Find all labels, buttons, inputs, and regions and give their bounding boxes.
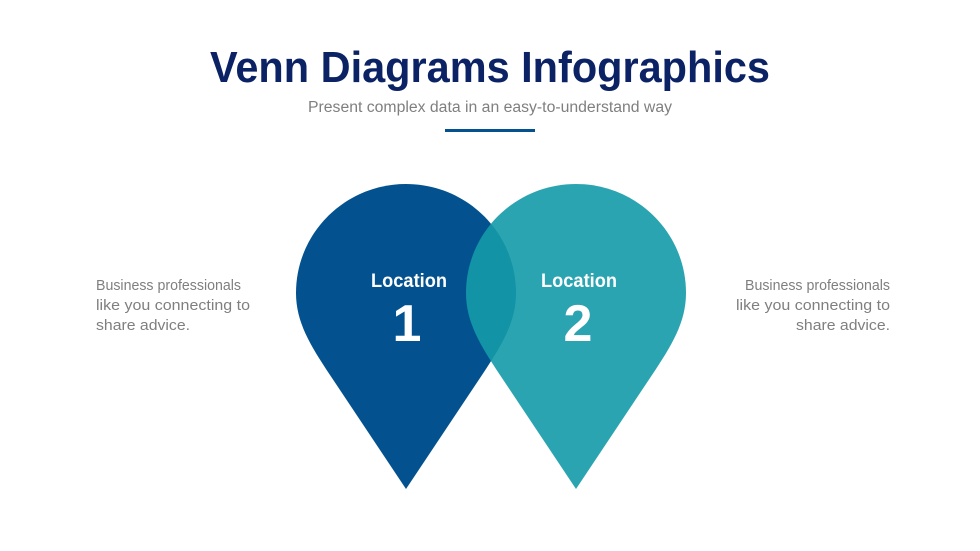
right text block: like you connecting to (736, 297, 890, 314)
left text block: Business professionals (96, 277, 241, 294)
label: location 1: 1 (393, 295, 421, 353)
pin: location 1 (296, 184, 516, 489)
right text block (736, 277, 890, 334)
left text block (96, 277, 250, 334)
label: location 2: 2 (564, 295, 592, 353)
venn diagram (296, 184, 686, 489)
left text block: share advice. (96, 317, 190, 334)
label: location 1: Location (371, 271, 447, 292)
title underline (445, 129, 535, 132)
label: location 2 (541, 271, 617, 353)
label: location 1 (371, 271, 447, 353)
left text block: like you connecting to (96, 297, 250, 314)
right text block: share advice. (796, 317, 890, 334)
title: Venn Diagrams Infographics (210, 43, 770, 92)
subtitle: Present complex data in an easy-to-understand way (308, 99, 672, 116)
label: location 2: Location (541, 271, 617, 292)
right text block: Business professionals (745, 277, 890, 294)
pin: location 2 (466, 184, 686, 489)
